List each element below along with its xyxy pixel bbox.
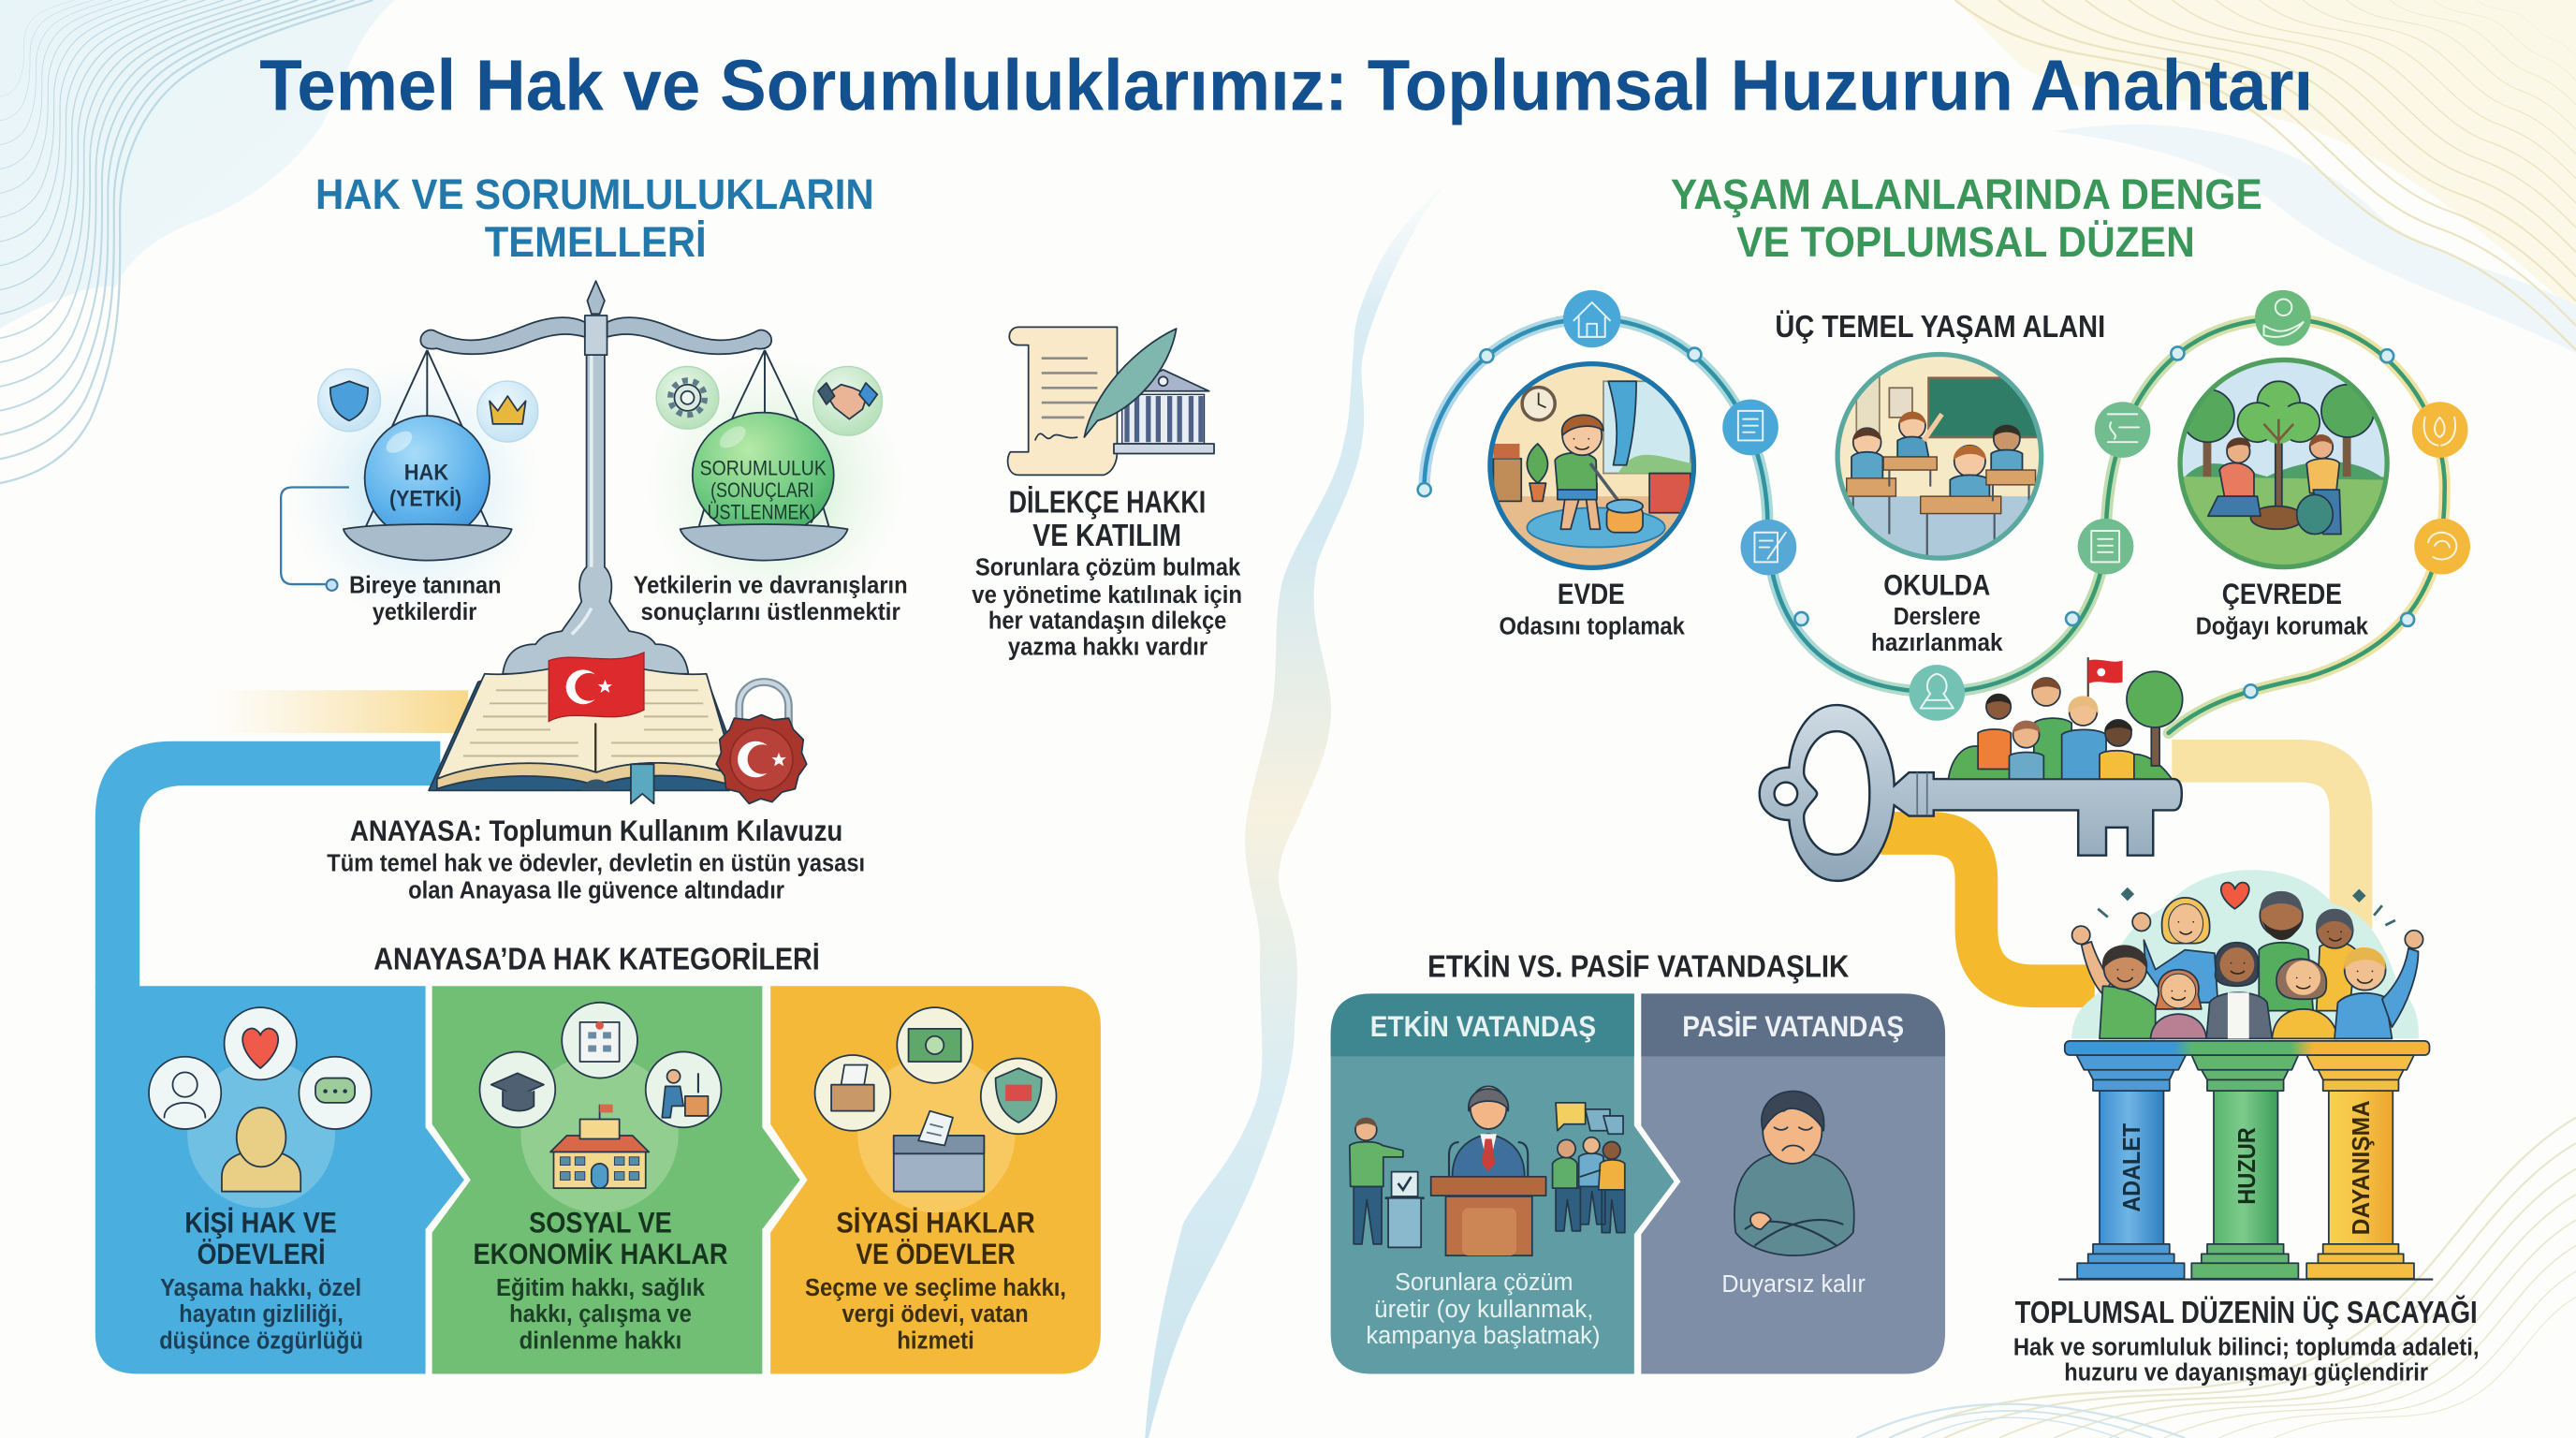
sphere: SORUMLULUK: ÜSTLENMEK) [708, 501, 815, 524]
text: Hak description: Bireye tanınan [349, 573, 501, 599]
back row [2132, 891, 2356, 1011]
text: Dilekçe hakkı [972, 486, 1242, 661]
icon: yellow recycle node [2414, 519, 2470, 575]
icon: constitution book [429, 653, 807, 803]
text: Toplumsal düzenin üç sacayağı: huzuru ve dayanışmayı güçlendirir [2064, 1358, 2428, 1387]
key [1760, 705, 2182, 881]
text: Çevrede: Doğayı korumak [2196, 612, 2368, 640]
text: Çevrede [2196, 577, 2368, 640]
text: Siyasi: vergi ödevi, vatan [842, 1299, 1029, 1328]
panel: Pasif vatandaş: PASİF VATANDAŞ [1682, 1009, 1904, 1043]
text: Siyasi: VE ÖDEVLER [856, 1237, 1016, 1270]
padlock and seal [716, 682, 807, 803]
icon: notebook node [1741, 520, 1796, 575]
pans [344, 524, 512, 561]
connector: HAK to description [281, 487, 349, 591]
text: Dilekçe hakkı: Sorunlara çözüm bulmak [975, 552, 1241, 580]
path: life-areas ribbon [1418, 319, 2445, 733]
heading: left section: HAK VE SORUMLULUKLARIN [315, 170, 874, 218]
text: Sosyal: EKONOMİK HAKLAR [473, 1237, 728, 1270]
pillar: Adalet: ADALET [2117, 1123, 2145, 1212]
flag [549, 653, 644, 722]
text: Dilekçe hakkı: yazma hakkı vardır [1008, 633, 1208, 661]
text: Sosyal: dinlenme hakkı [520, 1326, 681, 1354]
text: Dilekçe hakkı: VE KATILIM [1032, 519, 1181, 553]
icon: voter [1350, 1118, 1425, 1247]
text: Çevrede: ÇEVREDE [2222, 577, 2342, 610]
path nodes [1418, 346, 2414, 697]
panel: Pasif vatandaş: Duyarsız kalır [1721, 1269, 1866, 1298]
connector bands behind the book [95, 690, 468, 990]
heading: left section [315, 170, 874, 266]
text: Sorumluluk description: sonuçlarını üstlenmektir [640, 599, 900, 625]
panel: Etkin vatandaş: ETKİN VATANDAŞ [1370, 1009, 1596, 1043]
text: Toplumsal düzenin üç sacayağı [2013, 1295, 2479, 1387]
text: Kişi hak: Yaşama hakkı, özel [160, 1273, 361, 1301]
community on key [1949, 657, 2183, 779]
icon: hand with coin node [2255, 290, 2311, 346]
text: Hak description [349, 573, 501, 625]
icon: crown [477, 381, 538, 442]
icon: petition scroll, quill, building [1008, 327, 1214, 475]
pillar: Adalet [2076, 1055, 2186, 1279]
panel: Kişi hak ve ödevleri [95, 986, 464, 1374]
sphere: SORUMLULUK: (SONUÇLARI [710, 478, 814, 502]
heading: left section: TEMELLERİ [485, 218, 707, 266]
text: Sosyal [473, 1206, 728, 1354]
text: Okulda: Derslere [1894, 602, 1981, 630]
icon: house node [1563, 290, 1620, 347]
sphere: SORUMLULUK [693, 413, 834, 537]
text: Siyasi: hizmeti [897, 1326, 974, 1354]
pillar: Dayanışma: DAYANIŞMA [2347, 1100, 2375, 1235]
front row [2072, 926, 2423, 1038]
text: Siyasi [805, 1206, 1066, 1354]
icon: key with community [1760, 657, 2183, 881]
scene: Okulda [1837, 354, 2042, 558]
sphere: SORUMLULUK: SORUMLULUK [700, 456, 827, 479]
sphere: HAK: (YETKİ) [389, 487, 461, 512]
icon: yellow hands node [2412, 402, 2468, 458]
text: Sosyal: Eğitim hakkı, sağlık [496, 1273, 705, 1301]
icon: gear [656, 366, 719, 429]
icon: school, cap, hospital, worker [479, 1003, 721, 1188]
text: Kişi hak [159, 1206, 363, 1354]
text: Sosyal: hakkı, çalışma ve [509, 1299, 692, 1328]
text: Sorumluluk description: Yetkilerin ve davranışların [634, 573, 908, 599]
icon: passive person [1734, 1092, 1854, 1255]
sphere: HAK [365, 416, 490, 541]
scene: Evde [1490, 364, 1694, 567]
text: Evde: Odasını toplamak [1500, 612, 1685, 640]
icon: green node lower [2078, 519, 2133, 575]
pillar: Dayanışma [2306, 1055, 2414, 1279]
icon: ballot box, money, shield [815, 1007, 1057, 1192]
text: Toplumsal düzenin üç sacayağı: Hak ve sorumluluk bilinci; toplumda adaleti, [2013, 1332, 2479, 1360]
text: etkin description: Sorunlara çözüm [1395, 1268, 1573, 1296]
text: Dilekçe hakkı: DİLEKÇE HAKKI [1009, 486, 1206, 521]
scale post and base [420, 281, 771, 674]
text: Sorumluluk description [634, 573, 908, 625]
panel: Pasif vatandaş [1641, 993, 1945, 1374]
quill [1084, 329, 1177, 437]
text: etkin description: üretir (oy kullanmak, [1374, 1295, 1593, 1323]
icon: scroll node [1722, 400, 1778, 455]
text: Okulda: hazırlanmak [1871, 628, 2003, 656]
panel: Etkin vatandaş [1331, 993, 1674, 1374]
text: Anayasa description: olan Anayasa Ile güvence altındadır [408, 875, 784, 903]
text: Kişi hak: düşünce özgürlüğü [159, 1326, 363, 1354]
left pan strings [365, 350, 829, 529]
text: Kişi hak: KİŞİ HAK VE [184, 1206, 337, 1240]
text: Kişi hak: hayatın gizliliği, [179, 1299, 344, 1328]
panel: Sosyal ve ekonomik haklar [432, 986, 800, 1374]
text: Okulda: OKULDA [1883, 567, 1990, 601]
pillars: Adalet, Huzur, Dayanışma [2058, 1041, 2433, 1280]
heading: right section [1671, 170, 2262, 266]
text: Dilekçe hakkı: ve yönetime katılınak için [972, 580, 1242, 609]
heading: etkin vs pasif: ETKİN VS. PASİF VATANDAŞLIK [1427, 950, 1849, 985]
icon: teal node [1909, 665, 1965, 721]
text: etkin description [1366, 1268, 1600, 1349]
building [1114, 370, 1214, 453]
heading: üç temel yaşam alanı: ÜÇ TEMEL YAŞAM ALANI [1775, 310, 2105, 345]
text: Evde [1500, 577, 1685, 640]
icon: balance scale [285, 281, 903, 674]
text: Siyasi: Seçme ve seçlime hakkı, [805, 1273, 1066, 1301]
text: Kişi hak: ÖDEVLERİ [198, 1237, 326, 1270]
heading: right section: VE TOPLUMSAL DÜZEN [1736, 218, 2195, 266]
text: Anayasa description: Tüm temel hak ve ödevler, devletin en üstün yasası [327, 848, 865, 876]
text: etkin description: kampanya başlatmak) [1366, 1321, 1600, 1349]
pillar: Huzur [2191, 1055, 2298, 1279]
icon: shield [318, 369, 380, 432]
sphere: HAK: HAK [404, 462, 448, 486]
connector: yellow bands [1881, 761, 2351, 986]
icon: person with bubbles [149, 1007, 372, 1192]
heading: right section: YAŞAM ALANLARINDA DENGE [1671, 170, 2262, 218]
text: Dilekçe hakkı: her vatandaşın dilekçe [988, 606, 1226, 634]
icon: campaigning crowd [1553, 1103, 1625, 1233]
text: Toplumsal düzenin üç sacayağı: TOPLUMSAL DÜZENİN ÜÇ SACAYAĞI [2015, 1295, 2478, 1330]
icon: speaker at podium [1431, 1086, 1546, 1255]
text: Evde: EVDE [1558, 577, 1625, 610]
text: Sosyal: SOSYAL VE [529, 1206, 672, 1240]
text: Anayasa description: ANAYASA: Toplumun Kullanım Kılavuzu [350, 814, 842, 847]
text: Anayasa description [327, 814, 865, 903]
panel: Siyasi haklar ve ödevler [770, 986, 1101, 1374]
title: Temel Hak ve Sorumluluklarımız: Toplumsal Huzurun Anahtarı [259, 46, 2313, 126]
icon: community on pillars [2071, 870, 2423, 1038]
text: Hak description: yetkilerdir [373, 599, 476, 625]
icon: handshake [813, 366, 882, 435]
pillar: Huzur: HUZUR [2232, 1127, 2261, 1205]
heading: Anayasa'da hak kategorileri: ANAYASA’DA HAK KATEGORİLERİ [373, 943, 820, 977]
text: Siyasi: SİYASİ HAKLAR [836, 1206, 1035, 1240]
text: Okulda [1871, 567, 2003, 656]
scene: Çevrede [2180, 360, 2387, 567]
icon: green node [2095, 402, 2150, 458]
